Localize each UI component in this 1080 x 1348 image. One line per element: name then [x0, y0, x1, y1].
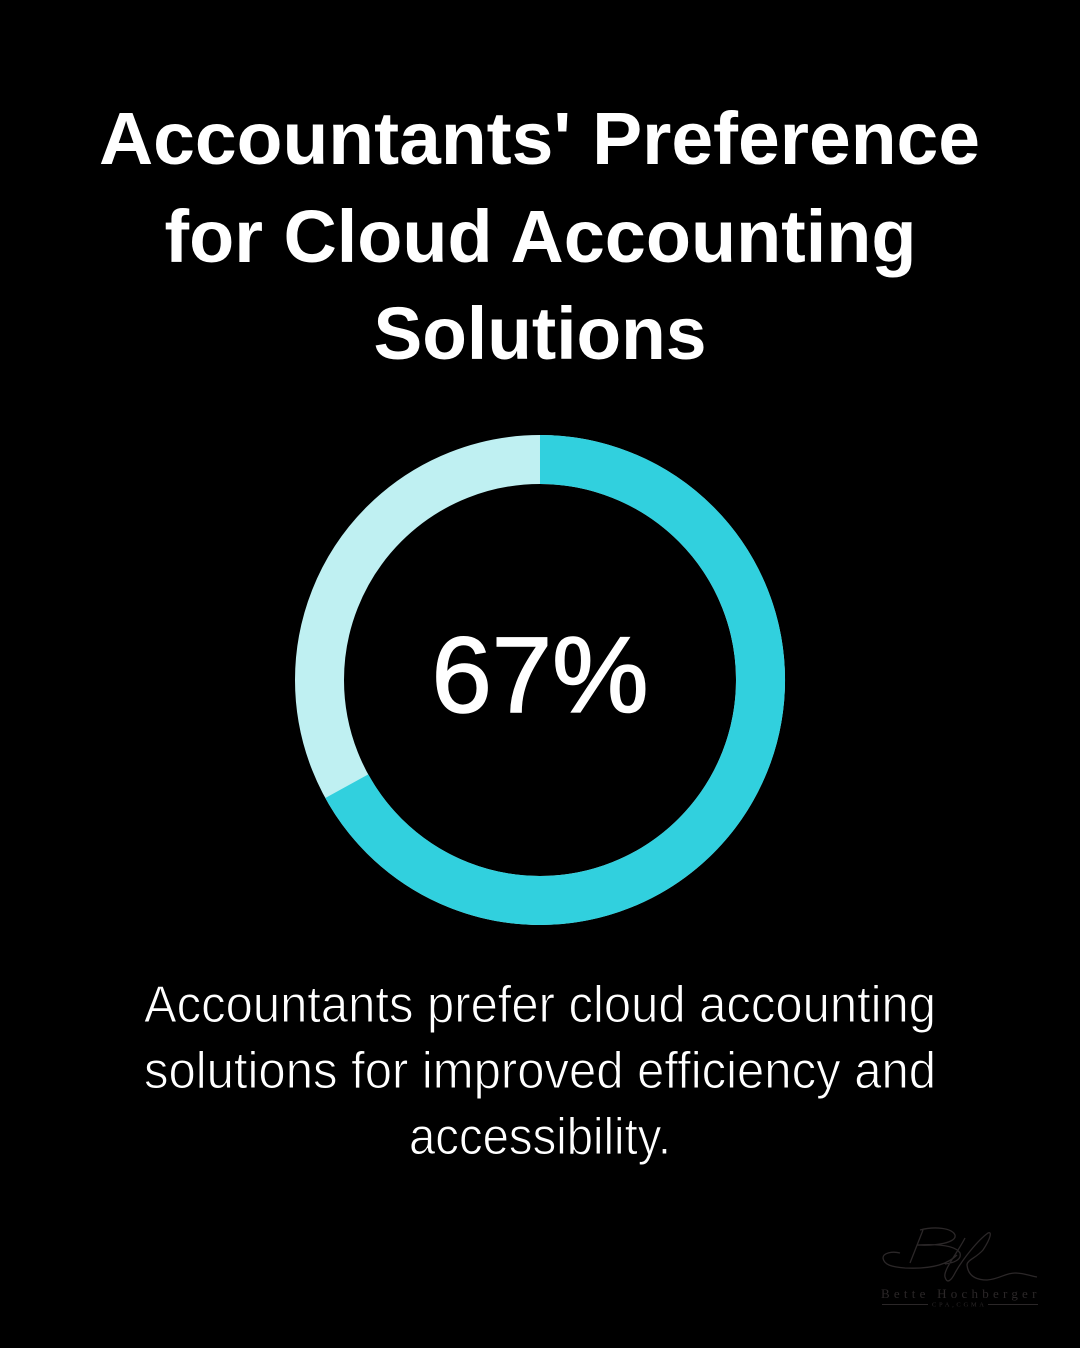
highlighted 67% arc: [347, 460, 761, 900]
logo: Bette Hochberger signature: CPA,CGMA: [932, 1302, 984, 1308]
title: [99, 97, 980, 375]
logo: Bette Hochberger signature: Bette Hochberger: [881, 1286, 1039, 1301]
donut chart: 67%: [320, 460, 761, 900]
title: Solutions: [374, 292, 706, 375]
description text: [144, 976, 936, 1166]
description text: Accountants prefer cloud accounting: [144, 976, 936, 1034]
logo: Bette Hochberger signature: [881, 1228, 1039, 1308]
description text: accessibility.: [409, 1108, 671, 1166]
title: for Cloud Accounting: [164, 195, 916, 278]
title: Accountants' Preference: [99, 97, 980, 180]
description text: solutions for improved efficiency and: [144, 1042, 936, 1100]
percentage value: 67%: [432, 614, 648, 735]
remaining 33% arc: [320, 460, 760, 900]
